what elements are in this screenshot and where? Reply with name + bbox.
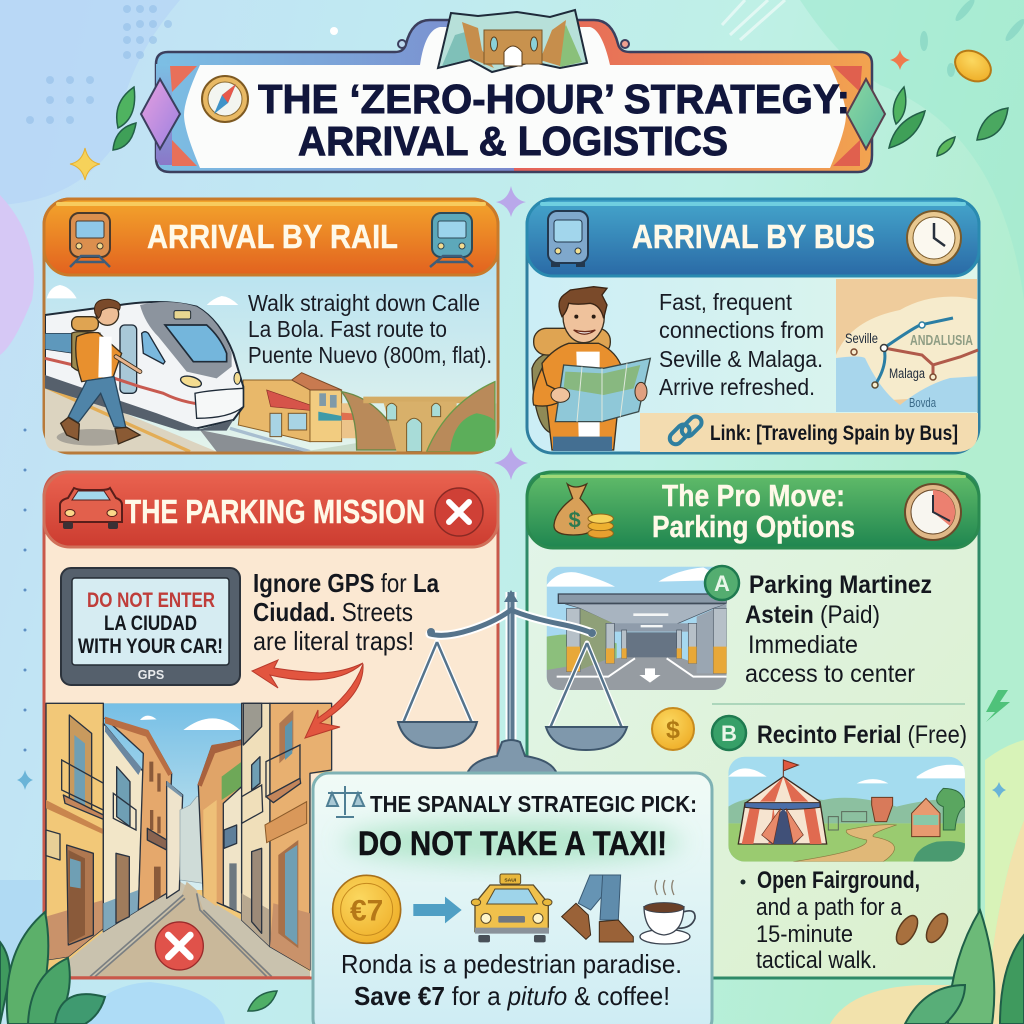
GPS warning device — [61, 568, 240, 685]
decoration: corner foliage left — [0, 912, 105, 1024]
title text: ARRIVAL & LOGISTICS — [298, 118, 728, 164]
option B — [712, 716, 967, 750]
icon: small scale — [327, 786, 364, 817]
road — [68, 882, 310, 977]
town and bridge — [238, 373, 497, 452]
rail body text — [248, 290, 492, 368]
bus body text: Fast, frequent — [659, 289, 792, 315]
callout body text: Ronda is a pedestrian paradise. — [341, 949, 682, 979]
icon: clock — [907, 211, 961, 265]
icon: folded map with bridge — [438, 10, 587, 72]
icon: train right — [430, 213, 473, 267]
option A: Astein (Paid) — [745, 601, 880, 629]
fairground text: and a path for a — [756, 894, 903, 921]
GPS warning device: GPS — [138, 668, 164, 682]
option A: access to center — [745, 660, 915, 688]
route map of Andalusia: Malaga — [889, 366, 925, 381]
badge B: B — [721, 721, 737, 746]
fairground illustration — [728, 757, 965, 862]
panel: the pro move — [527, 472, 979, 978]
parking body text — [253, 568, 439, 656]
pro header — [527, 472, 979, 548]
bus heading: ARRIVAL BY BUS — [632, 218, 875, 255]
decoration: corner foliage right — [905, 910, 1024, 1024]
bus body text: Seville & Malaga. — [659, 346, 823, 372]
pro heading: Parking Options — [652, 509, 855, 544]
parking body text: Ignore GPS for La — [253, 568, 439, 598]
banner diamond right — [847, 79, 885, 149]
fairground text — [740, 867, 920, 974]
GPS warning device: WITH YOUR CAR! — [78, 635, 223, 658]
icon: no entry — [155, 922, 203, 970]
GPS warning device: DO NOT ENTER — [87, 589, 215, 612]
callout body text: Save €7 for a pitufo & coffee! — [354, 981, 670, 1011]
icon: dollar coin — [652, 708, 694, 750]
link bar: Link: [Traveling Spain by Bus] — [710, 422, 958, 445]
banner diamond left — [141, 79, 180, 149]
route map of Andalusia: Bovda — [909, 396, 936, 410]
street scene — [46, 703, 332, 978]
decoration: sparkles — [17, 50, 1010, 798]
pro heading — [652, 478, 855, 544]
icon: chain link — [667, 414, 704, 447]
icon: bus — [548, 211, 588, 267]
icon: money bag — [554, 484, 613, 538]
icon: train left — [70, 213, 110, 267]
backpacker — [61, 299, 140, 444]
icon: footprints — [892, 910, 952, 948]
parking heading: THE PARKING MISSION — [125, 493, 425, 530]
bus body text: Arrive refreshed. — [659, 374, 815, 400]
icon: euro coin — [333, 875, 401, 943]
route map of Andalusia: Seville — [845, 331, 878, 346]
bus header — [527, 199, 979, 276]
fairground text: Open Fairground, — [757, 867, 920, 894]
option A — [705, 566, 932, 688]
balance scale — [398, 590, 627, 774]
option A: Immediate — [748, 631, 858, 659]
icon: compass — [202, 76, 248, 122]
backpacker with map — [532, 287, 650, 451]
title text: THE ‘ZERO-HOUR’ STRATEGY: — [258, 76, 850, 122]
fairground text: tactical walk. — [756, 947, 877, 974]
callout: do not take a taxi — [313, 773, 712, 1024]
badge A: A — [714, 571, 730, 596]
title text — [258, 76, 850, 164]
GPS warning device: LA CIUDAD — [104, 612, 197, 635]
badge A — [705, 566, 739, 600]
icon: red cross — [435, 488, 483, 536]
link bar — [640, 413, 978, 452]
icon: walking legs — [562, 875, 633, 942]
rail header — [44, 199, 498, 275]
rail body text: Walk straight down Calle — [248, 290, 480, 316]
panel: arrival by bus — [527, 199, 980, 453]
garage illustration — [547, 567, 727, 690]
bus body text: connections from — [659, 317, 824, 343]
icon: car — [60, 488, 122, 529]
option A: Parking Martinez — [749, 571, 932, 599]
icon: euro coin: €7 — [350, 895, 383, 928]
option B: Recinto Ferial (Free) — [757, 721, 967, 749]
rail body text: Puente Nuevo (800m, flat). — [248, 342, 492, 368]
pro heading: The Pro Move: — [662, 478, 845, 513]
callout main line: DO NOT TAKE A TAXI! — [358, 825, 667, 863]
train — [45, 302, 243, 431]
icon: dollar coin: $ — [666, 716, 680, 744]
fairground text: 15-minute — [756, 921, 853, 948]
route map of Andalusia: ANDALUSIA — [910, 333, 973, 349]
title banner — [141, 10, 885, 172]
icon: coffee cup — [640, 880, 695, 944]
parking body text: Ciudad. Streets — [253, 597, 413, 627]
rail body text: La Bola. Fast route to — [248, 316, 447, 342]
rail heading: ARRIVAL BY RAIL — [147, 218, 398, 255]
arrows: red warning — [252, 660, 363, 738]
right buildings — [198, 740, 242, 913]
icon: clock — [905, 484, 961, 540]
panel: the parking mission — [44, 472, 498, 978]
callout body text — [341, 949, 682, 1011]
icon: taxi — [471, 874, 552, 942]
badge B — [712, 716, 746, 750]
arrow — [413, 897, 462, 923]
icon: money bag: $ — [569, 507, 581, 532]
rail illustration — [45, 285, 497, 452]
callout heading: THE SPANALY STRATEGIC PICK: — [370, 791, 697, 817]
bus body text — [659, 289, 824, 400]
parking header — [44, 472, 498, 547]
icon: taxi: SAUI — [504, 877, 517, 883]
parking body text: are literal traps! — [253, 626, 414, 656]
panel: arrival by rail — [44, 199, 498, 453]
route map of Andalusia — [836, 279, 980, 415]
left buildings — [46, 703, 103, 960]
decoration: small leaf — [248, 991, 277, 1011]
decoration: leaves and coin — [113, 44, 1008, 156]
